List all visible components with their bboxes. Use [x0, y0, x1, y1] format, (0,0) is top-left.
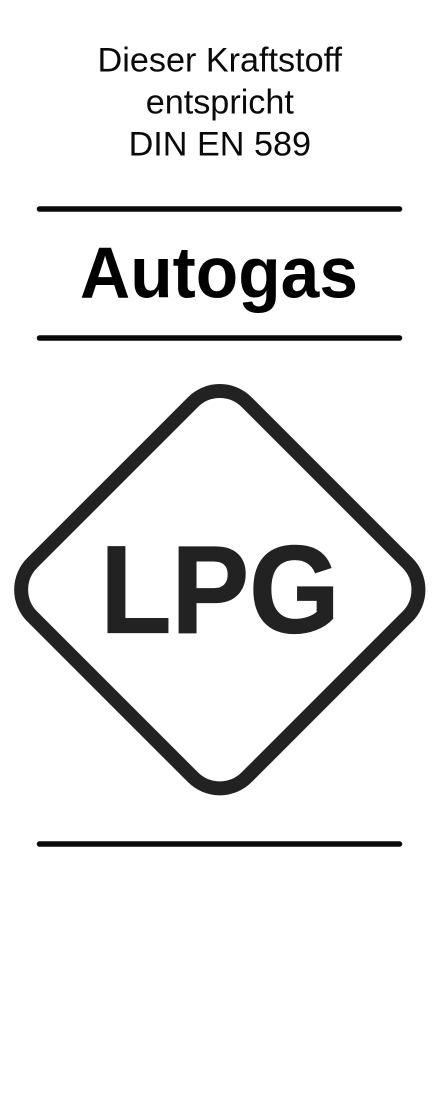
intro text: entspricht	[146, 84, 294, 122]
intro text: DIN EN 589	[129, 126, 311, 164]
LPG text: LPG	[100, 521, 340, 659]
diamond outline	[5, 375, 434, 804]
intro text: Dieser Kraftstoff	[98, 42, 343, 80]
intro text	[98, 42, 343, 164]
heading: Autogas: Autogas	[80, 232, 358, 313]
